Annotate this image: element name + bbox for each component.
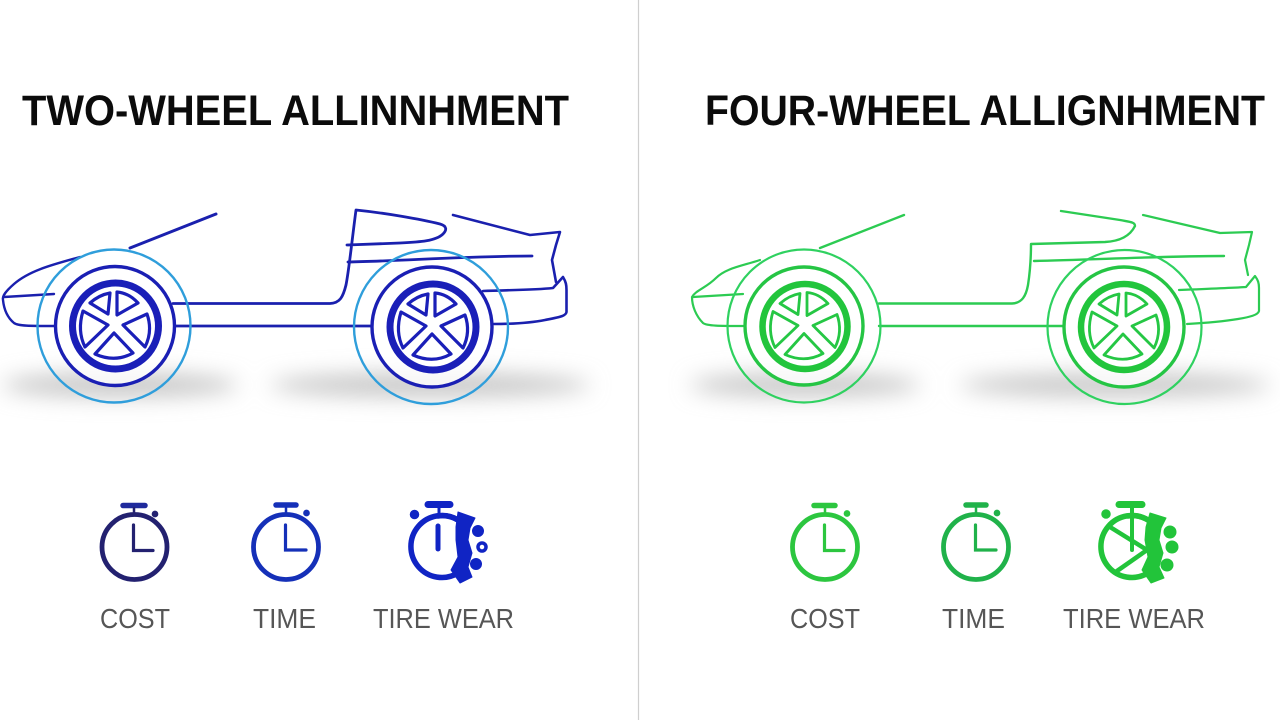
icon: cost stopwatch green (792, 506, 858, 580)
label: time green: TIME (942, 603, 1005, 634)
front wheel blue (38, 250, 190, 402)
label: tire wear green: TIRE WEAR (1063, 603, 1205, 634)
rear wheel green (1048, 250, 1202, 404)
blue car body outline (3, 210, 566, 326)
panel: four-wheel alignment (690, 87, 1270, 634)
title: two-wheel alignment: TWO-WHEEL ALLINNHMENT (22, 87, 569, 135)
green car body outline (692, 211, 1259, 326)
icon: cost stopwatch blue (102, 506, 167, 580)
ground shadow under green car (690, 373, 1270, 397)
icon: tire wear stopwatch blue (410, 504, 486, 583)
label: time blue: TIME (253, 603, 316, 634)
icon: time stopwatch green (944, 505, 1008, 580)
ground shadow under blue car (2, 373, 590, 397)
icon: time stopwatch blue (254, 505, 318, 580)
label: tire wear blue: TIRE WEAR (373, 603, 514, 634)
label: cost green: COST (790, 603, 860, 634)
panel: two-wheel alignment (2, 87, 590, 634)
label: cost blue: COST (100, 603, 170, 634)
front wheel green (728, 250, 880, 402)
icon: tire wear stopwatch green (1101, 504, 1178, 583)
rear wheel blue (354, 250, 508, 404)
